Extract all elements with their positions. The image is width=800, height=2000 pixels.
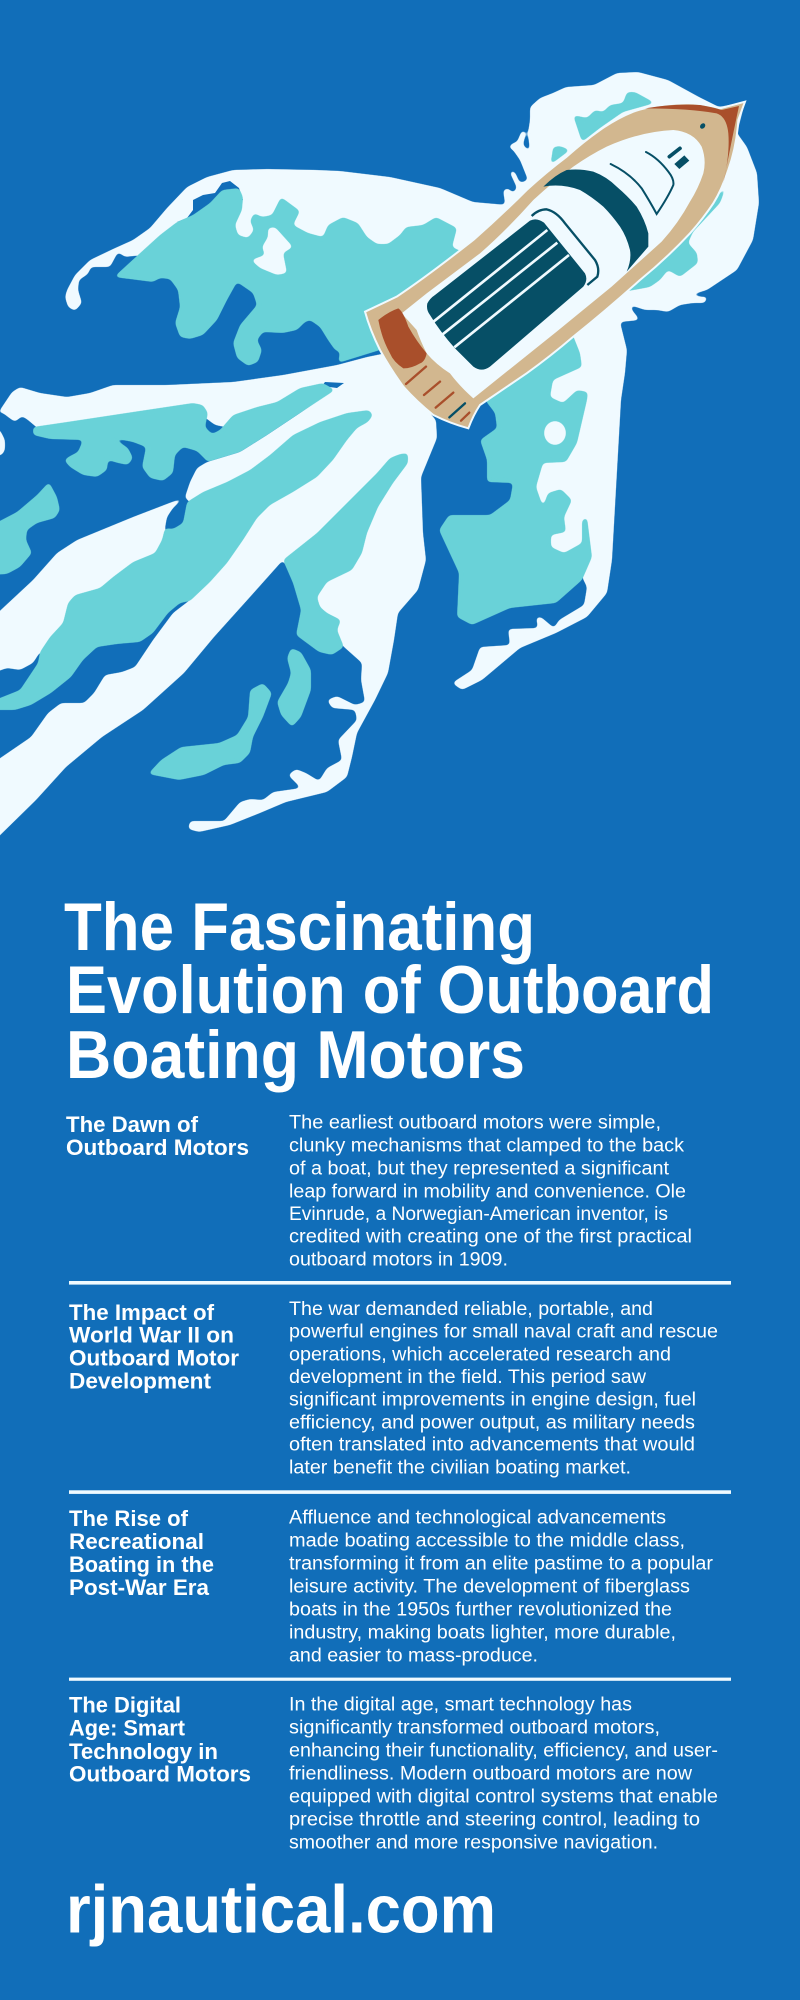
section 2 body: [289, 1298, 718, 1478]
section 2 heading: The Impact of: [69, 1300, 214, 1325]
section 3 body: made boating accessible to the middle class,: [289, 1529, 685, 1551]
section 3 body: leisure activity. The development of fiberglass: [289, 1575, 690, 1597]
section 4 body: significantly transformed outboard motors,: [289, 1716, 660, 1738]
section 2 heading: World War II on: [69, 1323, 234, 1348]
section 1 body: of a boat, but they represented a significant: [289, 1157, 670, 1179]
section 2 body: The war demanded reliable, portable, and: [289, 1298, 653, 1320]
section 4 heading: Technology in: [69, 1739, 218, 1764]
cockpit: [427, 219, 586, 370]
section 4 body: equipped with digital control systems that enable: [289, 1785, 718, 1807]
section 2 body: significant improvements in engine design, fuel: [289, 1389, 696, 1411]
section 1 body: The earliest outboard motors were simple,: [289, 1111, 661, 1133]
section 1 heading: The Dawn of: [66, 1112, 198, 1137]
deck: [402, 130, 705, 398]
section 3 heading: Boating in the: [69, 1552, 214, 1577]
section 3 body: Affluence and technological advancements: [289, 1506, 666, 1528]
section 3 body: [289, 1506, 713, 1666]
section 3 body: transforming it from an elite pastime to a popular: [289, 1552, 713, 1574]
section 3 heading: Recreational: [69, 1529, 204, 1554]
hero illustration: boat and wake: [0, 72, 759, 845]
section 2 body: operations, which accelerated research and: [289, 1343, 671, 1365]
section 3 body: and easier to mass-produce.: [289, 1644, 538, 1666]
section 4 heading: Age: Smart: [69, 1716, 185, 1741]
section 4 heading: Outboard Motors: [69, 1762, 251, 1787]
footer website: rjnautical.com: [66, 1872, 496, 1948]
section 4 heading: [69, 1693, 251, 1787]
section 4 body: enhancing their functionality, efficiency, and user-: [289, 1739, 718, 1761]
bow trim: [645, 105, 739, 183]
turquoise water patches: [0, 92, 727, 780]
section 4: The Digital Age: [69, 1693, 718, 1853]
section 3 heading: Post-War Era: [69, 1575, 209, 1600]
section 1 body: clunky mechanisms that clamped to the back: [289, 1134, 684, 1156]
section 2 body: later benefit the civilian boating market.: [289, 1456, 631, 1478]
section 1 body: outboard motors in 1909.: [289, 1248, 508, 1270]
white foam wake: [0, 72, 759, 845]
section 2 heading: Outboard Motor: [69, 1346, 239, 1371]
section 4 body: friendliness. Modern outboard motors are now: [289, 1762, 693, 1784]
section 3: The Rise of Recreational Boating: [69, 1506, 713, 1666]
section 1 heading: [66, 1112, 249, 1160]
stern vents: [406, 367, 469, 421]
cockpit stripes: [433, 230, 569, 347]
section 2: The Impact of World War II: [69, 1298, 718, 1478]
section 4 body: In the digital age, smart technology has: [289, 1693, 632, 1715]
section 2 body: often translated into advancements that would: [289, 1434, 695, 1456]
section 2 body: development in the field. This period saw: [289, 1366, 647, 1388]
stern seat: [378, 308, 427, 368]
cockpit frame: [532, 209, 598, 285]
section 1 heading: Outboard Motors: [66, 1135, 249, 1160]
boat seen from above: [365, 102, 745, 428]
section 3 body: industry, making boats lighter, more durable,: [289, 1621, 676, 1643]
title: [64, 889, 714, 1093]
section 3 body: boats in the 1950s further revolutionized the: [289, 1598, 672, 1620]
section 4 body: precise throttle and steering control, leading to: [289, 1808, 700, 1830]
bow hatches: [669, 122, 706, 169]
section 1 body: leap forward in mobility and convenience. Ole: [289, 1180, 686, 1202]
section 2 heading: [69, 1300, 239, 1393]
water gaps inside the foam: [177, 181, 344, 388]
section 2 body: powerful engines for small naval craft and rescue: [289, 1321, 718, 1343]
section 3 heading: The Rise of: [69, 1506, 188, 1531]
section 2 heading: Development: [69, 1368, 211, 1393]
section 3 heading: [69, 1506, 214, 1600]
hull: [365, 102, 745, 428]
windshield: [611, 152, 673, 214]
section 1 body: [289, 1111, 692, 1270]
title: Boating Motors: [66, 1017, 525, 1093]
section 4 heading: The Digital: [69, 1693, 181, 1718]
section 1 body: Evinrude, a Norwegian-American inventor, is: [289, 1203, 668, 1225]
section 2 body: efficiency, and power output, as military needs: [289, 1411, 695, 1433]
cabin band: [543, 169, 648, 272]
section 4 body: smoother and more responsive navigation.: [289, 1831, 658, 1853]
section 4 body: [289, 1693, 718, 1853]
title: The Fascinating: [64, 889, 535, 965]
section 1: The Dawn of Outboard Motors: [66, 1111, 692, 1270]
title: Evolution of Outboard: [66, 952, 714, 1028]
foam islands within the water: [251, 227, 566, 445]
section 1 body: credited with creating one of the first practical: [289, 1226, 692, 1248]
